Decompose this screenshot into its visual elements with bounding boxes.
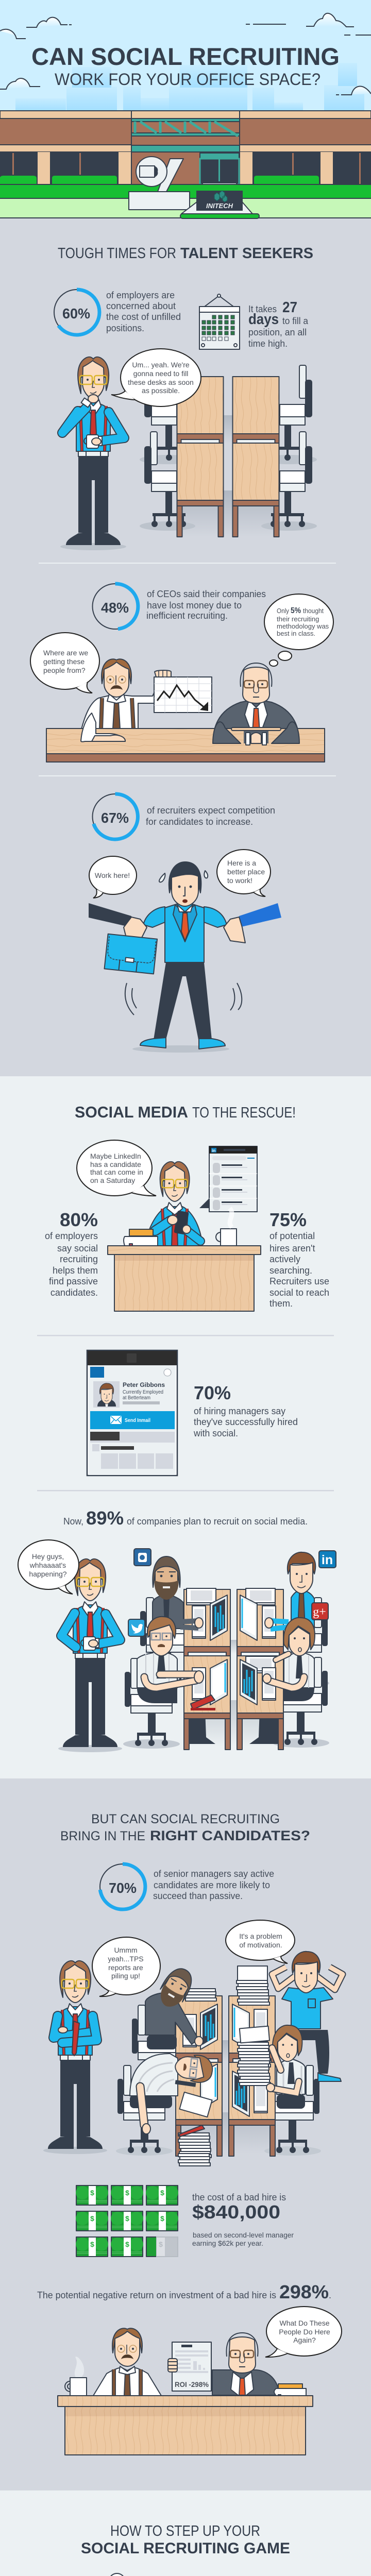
linkedin profile phone [87, 1350, 177, 1476]
title: CAN SOCIAL RECRUITING [31, 43, 340, 70]
stat: CEOs lost money: have lost money due to [147, 600, 242, 611]
stat: cost of bad hire [192, 2192, 294, 2247]
speech bubble: fill these desks: Um... yeah. We're [132, 361, 190, 369]
speech bubble: work here: Work here! [95, 871, 130, 879]
stat: 75%: searching. [269, 1265, 312, 1276]
speech bubble: where are we getting: Where are we [43, 649, 88, 657]
stat: 75%: hires aren't [269, 1243, 315, 1253]
heading: right candidates: BRING IN THE [60, 1829, 145, 1843]
stat: 89%: Now, [63, 1516, 83, 1527]
stat: 298% [37, 2281, 331, 2302]
speech bubble: what do these people do [265, 2307, 342, 2357]
coworker: bearded [153, 1556, 183, 1629]
stat: 27 days: days [248, 311, 279, 328]
stat: 75%: actively [269, 1254, 300, 1264]
stat: 80%: find passive [49, 1276, 98, 1286]
speech bubble: TPS reports: Ummm [114, 1946, 138, 1954]
heading: social media to the rescue: TO THE RESCUE! [192, 1105, 296, 1121]
speech bubble: what do these people do: What Do These [279, 2319, 330, 2327]
stat: CEOs lost money [146, 589, 266, 621]
heading: right candidates: BUT CAN SOCIAL RECRUITING [91, 1812, 280, 1826]
icon: google plus [312, 1603, 328, 1620]
heading: right candidates: RIGHT CANDIDATES? [150, 1828, 310, 1843]
donut: 70% [100, 1864, 145, 1909]
stat: recruiters competition: for candidates to increase. [146, 817, 253, 827]
speech bubble: where are we getting [30, 633, 99, 693]
speech bubble: better place to work: Here is a [227, 859, 256, 867]
speech bubble: maybe linkedin [77, 1140, 156, 1196]
speech bubble: fill these desks: gonna need to fill [133, 369, 188, 378]
character: Lumbergh hey guys [58, 1559, 122, 1752]
scene: Bill and boss with ROI report: ROI -298% [175, 2380, 209, 2388]
icon: calendar [199, 294, 240, 349]
linkedin search popup [199, 1146, 257, 1212]
stat: 75%: of potential [269, 1231, 315, 1241]
speech bubble: work here [89, 856, 137, 898]
heading: tough times [58, 245, 313, 262]
heading: step up your game [81, 2523, 290, 2557]
icon: instagram [134, 1549, 151, 1566]
heading: tough times: TOUGH TIMES FOR [58, 245, 176, 262]
office building [0, 111, 371, 218]
stat: senior managers [153, 1869, 274, 1901]
speech bubble: problem of motivation: It's a problem [239, 1932, 282, 1940]
coworker: nerd tired [266, 2025, 305, 2109]
stat: 27 days: to fill a [282, 316, 309, 326]
donut: 48%: 48% [101, 600, 129, 616]
stat: 80%: of employers [45, 1231, 98, 1241]
speech bubble: maybe linkedin: on a Saturday [90, 1176, 135, 1184]
stat: CEOs lost money: inefficient recruiting. [146, 611, 228, 621]
coworker: bearded asleep [145, 1963, 216, 2049]
stat: cost of bad hire: earning $62k per year. [192, 2239, 263, 2247]
title [31, 43, 340, 89]
office cubicles scene [123, 1552, 329, 1750]
stat: senior managers: of senior managers say active [154, 1869, 274, 1879]
speech bubble: TPS reports: piling up! [111, 1972, 140, 1980]
overworked office scene [116, 1952, 343, 2166]
character: Lumbergh arms crossed [43, 1961, 107, 2154]
icon: linkedin: in [322, 1553, 333, 1567]
donut: 67% [93, 794, 138, 839]
icon: twitter [128, 1619, 145, 1636]
icon: google plus: g+ [313, 1605, 326, 1619]
stat: 80%: 80% [60, 1209, 98, 1230]
clouds [0, 13, 371, 95]
speech bubble: maybe linkedin: that can come in [90, 1168, 143, 1176]
speech bubble: TPS reports: yeah...TPS [108, 1955, 144, 1963]
scene: Bill and boss with ROI report [58, 2328, 313, 2455]
linkedin profile phone: at Betterteam [123, 1395, 150, 1401]
thought bubble: 5% best in class: methodology was [277, 622, 329, 630]
heading: tough times: TALENT SEEKERS [180, 245, 313, 262]
stat: 80%: candidates. [50, 1287, 98, 1298]
speech bubble: hey guys: Hey guys, [32, 1552, 64, 1561]
speech bubble: hey guys: happening? [29, 1570, 67, 1578]
speech bubble: what do these people do: People Do Here [279, 2328, 330, 2336]
coworker: nerd [284, 1618, 315, 1688]
stat: cost of bad hire: based on second-level manager [193, 2231, 294, 2239]
donut: 67%: 67% [101, 810, 129, 826]
coworker: Peter [288, 1552, 315, 1630]
abstract sculpture [129, 157, 190, 210]
heading: step up your game: HOW TO STEP UP YOUR [110, 2523, 260, 2539]
stat: 27 days: time high. [248, 338, 288, 349]
icon: cash bundles: $ [90, 2189, 94, 2197]
thought bubble: 5% best in class [264, 594, 333, 666]
stat: 80%: say social [57, 1243, 98, 1253]
heading: social media to the rescue [75, 1103, 296, 1121]
speech bubble: problem of motivation [226, 1920, 295, 1963]
icon: cash bundles [76, 2185, 178, 2257]
speech bubble: TPS reports: reports are [108, 1963, 143, 1972]
stat: 298%: . [329, 2290, 331, 2300]
stat: employers concerned: concerned about [106, 301, 176, 311]
speech bubble: better place to work [217, 850, 271, 896]
stat: recruiters competition: of recruiters expect competition [147, 805, 275, 816]
scene: Lumbergh at desk with tablet [108, 1162, 261, 1311]
stat: recruiters competition [146, 805, 275, 827]
character: recruit pulled by two hands [89, 862, 281, 1053]
speech bubble: what do these people do: Again? [293, 2336, 316, 2344]
donut: 60%: 60% [62, 306, 90, 321]
stat: employers concerned: positions. [106, 323, 144, 333]
coworker: Peter relaxing [272, 1952, 343, 2081]
linkedin search popup: in [212, 1148, 215, 1153]
thought bubble: 5% best in class: thought [303, 607, 324, 615]
stat: 89%: 89% [86, 1507, 124, 1529]
donut: 48% [93, 584, 138, 629]
heading: social media to the rescue: SOCIAL MEDIA [75, 1103, 188, 1121]
speech bubble: where are we getting: getting these [43, 657, 85, 666]
stat: 89% [63, 1507, 308, 1529]
stat: 80% [45, 1209, 98, 1298]
stat: 80%: recruiting [60, 1254, 98, 1264]
speech bubble: hey guys [18, 1540, 79, 1594]
stat: 70% hiring managers: with social. [193, 1428, 238, 1438]
coworker: Michael asleep [130, 2053, 214, 2134]
stat: 70% hiring managers: of hiring managers say [194, 1406, 285, 1416]
stat: 298%: The potential negative return on investment of a bad hire is [37, 2290, 276, 2300]
icon: cash bundles: $ [159, 2240, 163, 2248]
stat: senior managers: candidates are more likely to [154, 1880, 270, 1890]
character: Lumbergh with coffee [60, 357, 126, 550]
header skyline [15, 63, 364, 111]
stat: employers concerned [106, 290, 181, 333]
title: WORK FOR YOUR OFFICE SPACE? [55, 70, 321, 89]
speech bubble: maybe linkedin: has a candidate [90, 1160, 141, 1168]
stat: 75%: them. [269, 1298, 293, 1309]
stat: employers concerned: of employers are [106, 290, 175, 300]
speech bubble: where are we getting: people from? [43, 666, 86, 674]
stat: 80%: helps them [53, 1265, 98, 1276]
stat: 27 days: position, an all [248, 327, 307, 337]
donut: 70%: 70% [109, 1880, 137, 1896]
stat: 70% hiring managers: they've successfully hired [194, 1417, 298, 1427]
speech bubble: fill these desks: as possible. [142, 386, 180, 395]
stat: 75% [269, 1209, 329, 1309]
icon: linkedin [319, 1551, 336, 1568]
speech bubble: fill these desks [111, 349, 201, 406]
linkedin profile phone: Currently Employed [123, 1389, 163, 1395]
speech bubble: better place to work: better place [227, 868, 265, 876]
donut: 60% [54, 290, 99, 335]
heading: right candidates [60, 1812, 310, 1843]
initech sign: INITECH [206, 202, 233, 210]
stat: 70% hiring managers [193, 1382, 298, 1438]
linkedin profile phone: Peter Gibbons [123, 1381, 165, 1388]
speech bubble: better place to work: to work! [227, 876, 252, 885]
stat: 27 days: 27 [282, 299, 297, 316]
stat: 89%: of companies plan to recruit on social media. [127, 1516, 308, 1527]
speech bubble: hey guys: whhaaaat's [29, 1561, 66, 1569]
initech sign [180, 191, 259, 218]
stat: CEOs lost money: of CEOs said their companies [147, 589, 266, 599]
stat: 70% hiring managers: 70% [194, 1382, 231, 1403]
stat: 75%: social to reach [269, 1287, 329, 1298]
thought bubble: 5% best in class: 5% [291, 606, 301, 615]
stat: employers concerned: the cost of unfilled [106, 312, 181, 322]
thought bubble: 5% best in class: Only [277, 607, 289, 615]
linkedin profile phone: Send Inmail [125, 1418, 150, 1423]
speech bubble: TPS reports [92, 1937, 160, 1996]
stat: 27 days [248, 299, 309, 349]
speech bubble: maybe linkedin: Maybe LinkedIn [90, 1152, 141, 1160]
desks and chairs scene [140, 365, 317, 537]
stat: 75%: Recruiters use [269, 1276, 329, 1286]
stat: cost of bad hire: the cost of a bad hire is [192, 2192, 286, 2202]
stat: senior managers: succeed than passive. [153, 1891, 243, 1901]
heading: step up your game: SOCIAL RECRUITING GAME [81, 2540, 290, 2557]
speech bubble: problem of motivation: of motivation. [239, 1941, 282, 1949]
coworker: Michael [137, 1617, 177, 1688]
speech bubble: fill these desks: these desks as soon [128, 378, 194, 386]
meeting table scene: Bill with chart and the boss [46, 659, 325, 762]
stat: 27 days: It takes [248, 304, 277, 314]
thought bubble: 5% best in class: best in class. [277, 630, 315, 637]
stat: 298%: 298% [279, 2281, 329, 2302]
stat: 75%: 75% [269, 1209, 307, 1230]
monitor with webcam [65, 2573, 169, 2576]
thought bubble: 5% best in class: their recruiting [277, 615, 319, 623]
paper stacks [178, 1966, 271, 2166]
stat: cost of bad hire: $840,000 [192, 2201, 280, 2223]
